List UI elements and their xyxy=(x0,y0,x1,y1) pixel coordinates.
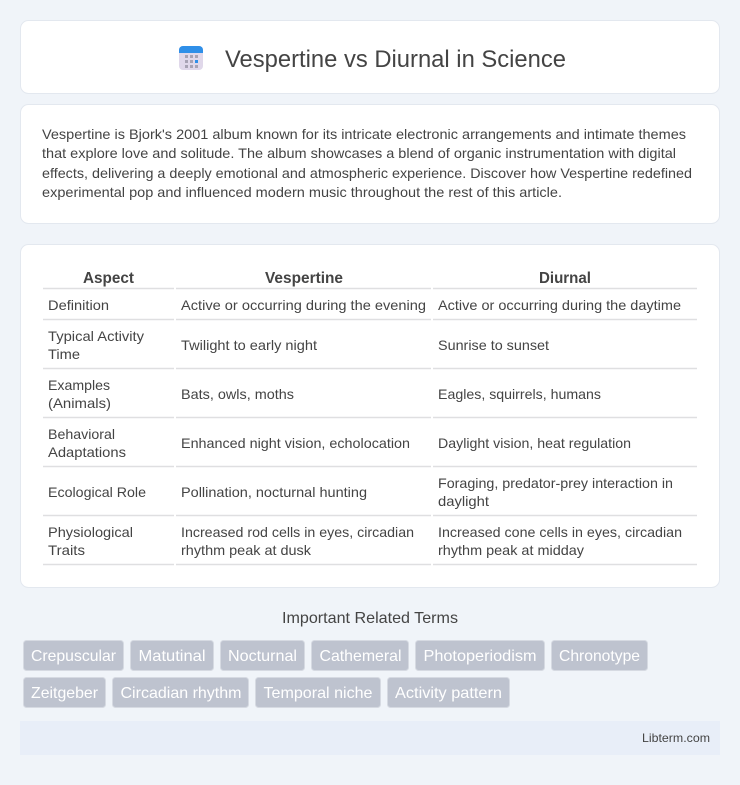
icon: calendar xyxy=(179,46,203,70)
tag: Activity pattern xyxy=(388,678,510,708)
row: examples: Examples xyxy=(48,377,110,393)
row: typical activity time: Twilight to early night xyxy=(181,337,317,353)
row: physiological traits: Increased cone cells in eyes, circadian xyxy=(438,524,682,540)
row: definition: Active or occurring during the evening xyxy=(181,297,426,313)
row: ecological role: daylight xyxy=(438,493,489,509)
tag: Zeitgeber xyxy=(24,678,106,708)
row: typical activity time xyxy=(48,328,549,362)
panel: introduction xyxy=(20,104,720,224)
row: physiological traits xyxy=(48,524,682,558)
row: examples: Eagles, squirrels, humans xyxy=(438,386,601,402)
row: examples: (Animals) xyxy=(48,395,111,411)
text block: introduction: effects, delivering a deeply emotional and atmospheric experience. Discover how Vespertine redefined xyxy=(42,165,692,181)
tag: Cathemeral: Cathemeral xyxy=(320,648,402,665)
text block: introduction xyxy=(42,126,692,200)
text block: introduction: Vespertine is Bjork's 2001 album known for its intricate electronic arrangements and intimate themes xyxy=(42,126,686,142)
row: physiological traits: Traits xyxy=(48,542,85,558)
tag: Matutinal xyxy=(130,640,214,670)
related term tags xyxy=(24,640,648,708)
row: behavioral adaptations: Daylight vision, heat regulation xyxy=(438,435,631,451)
row: definition: Active or occurring during the daytime xyxy=(438,297,681,313)
tag: Circadian rhythm: Circadian rhythm xyxy=(120,685,242,702)
tag: Cathemeral xyxy=(312,640,408,670)
footer credit: Libterm.com xyxy=(642,731,710,745)
row: ecological role: Foraging, predator-prey interaction in xyxy=(438,475,673,491)
row: physiological traits: Physiological xyxy=(48,524,133,540)
tag: Crepuscular xyxy=(24,640,124,670)
tag: Matutinal: Matutinal xyxy=(138,648,206,665)
tag: Photoperiodism: Photoperiodism xyxy=(424,648,536,665)
row: behavioral adaptations: Enhanced night vision, echolocation xyxy=(181,435,410,451)
tag: Nocturnal xyxy=(220,640,304,670)
tag: Chronotype xyxy=(552,640,648,670)
tag: Temporal niche: Temporal niche xyxy=(264,685,373,702)
panel: comparison table xyxy=(20,244,720,588)
tag: Chronotype: Chronotype xyxy=(559,648,640,665)
row: definition xyxy=(48,297,681,313)
row: ecological role: Pollination, nocturnal hunting xyxy=(181,484,367,500)
row: definition: Definition xyxy=(48,297,109,313)
row: physiological traits: rhythm peak at dusk xyxy=(181,542,312,558)
tag: Circadian rhythm xyxy=(112,678,248,708)
row: behavioral adaptations: Adaptations xyxy=(48,444,126,460)
row: physiological traits: rhythm peak at midday xyxy=(438,542,584,558)
row: behavioral adaptations: Behavioral xyxy=(48,426,115,442)
tag: Photoperiodism xyxy=(416,640,544,670)
row: typical activity time: Sunrise to sunset xyxy=(438,337,549,353)
table header: Vespertine xyxy=(265,270,343,287)
row: ecological role: Ecological Role xyxy=(48,484,146,500)
table header: Aspect xyxy=(83,270,135,287)
text block: introduction: that explore love and solitude. The album showcases a blend of organic instrumentation with digital xyxy=(42,145,676,161)
tag: Zeitgeber: Zeitgeber xyxy=(31,685,99,702)
row: ecological role xyxy=(48,475,673,509)
tag: Crepuscular: Crepuscular xyxy=(31,648,117,665)
table header xyxy=(83,270,591,287)
row: examples: Bats, owls, moths xyxy=(181,386,294,402)
row: behavioral adaptations xyxy=(48,426,631,460)
row: examples xyxy=(48,377,601,411)
tag: Temporal niche xyxy=(256,678,380,708)
row: physiological traits: Increased rod cells in eyes, circadian xyxy=(181,524,414,540)
row: typical activity time: Time xyxy=(48,346,80,362)
text block: introduction: experimental pop and influenced modern music throughout the rest of this article. xyxy=(42,184,562,200)
heading: important related terms: Important Related Terms xyxy=(282,610,458,627)
title: Vespertine vs Diurnal in Science xyxy=(225,46,566,73)
title panel xyxy=(20,20,720,94)
tag: Nocturnal: Nocturnal xyxy=(228,648,297,665)
tag: Activity pattern: Activity pattern xyxy=(395,685,502,702)
footer xyxy=(20,721,720,755)
row: typical activity time: Typical Activity xyxy=(48,328,144,344)
table header: Diurnal xyxy=(539,270,591,287)
